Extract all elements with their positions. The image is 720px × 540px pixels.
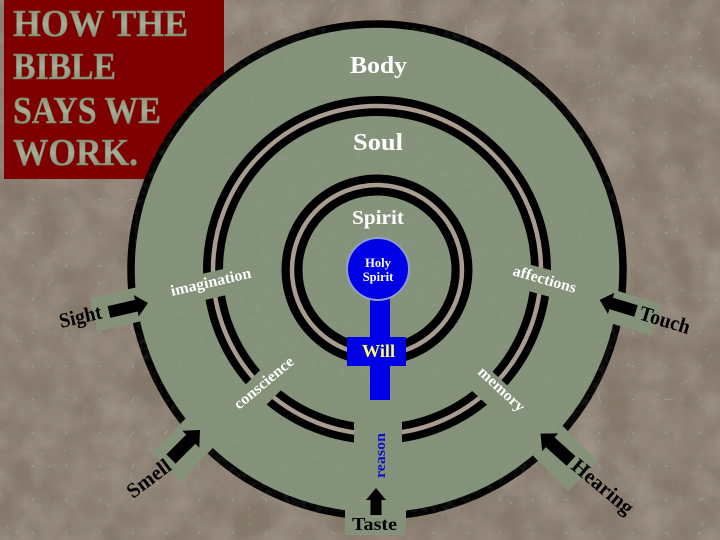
label: soul: Soul [353,130,403,156]
sense channel: hearing [533,426,598,491]
outer disk: body [131,24,623,516]
arrow: sight [107,292,150,323]
label: taste: Taste [352,514,397,534]
concentric rings diagram [90,24,661,535]
label: holy spirit: Holy [365,256,392,270]
label: memory: memory [474,363,528,416]
will stem and holy spirit [347,238,409,400]
title text: BIBLE [13,46,116,88]
label: hearing: Hearing [567,453,639,520]
label: body: Body [350,53,407,79]
label: will: Will [362,341,395,361]
label: conscience: conscience [231,353,298,413]
arrow: touch [596,289,639,322]
label: affections: affections [511,263,578,297]
title text: SAYS WE [13,90,161,132]
will box [347,337,406,366]
title text: WORK. [13,132,138,174]
label: sight: Sight [57,300,104,333]
arrow: smell [163,422,208,467]
label: holy spirit: Spirit [363,270,394,284]
label: touch: Touch [637,301,694,339]
title text: HOW THE [13,3,188,45]
holy spirit circle [347,238,409,300]
label: smell: Smell [122,454,176,503]
title text [13,3,188,174]
sense channel: taste [345,505,406,535]
sense channel: smell [152,416,217,481]
ring gaps for the faculties [178,260,575,451]
inner ring: spirit boundary [292,185,462,355]
label: imagination: imagination [169,265,253,300]
label: holy spirit [363,256,394,284]
disk texture [135,28,619,512]
title panel [4,0,224,179]
label: reason: reason [373,432,389,478]
label: spirit: Spirit [352,207,404,229]
stem [370,295,390,400]
sense channel: touch [607,291,661,336]
arrow: taste [366,488,386,515]
sense channel: sight [90,287,146,331]
arrow: hearing [533,425,579,470]
middle ring: soul boundary [213,106,541,434]
